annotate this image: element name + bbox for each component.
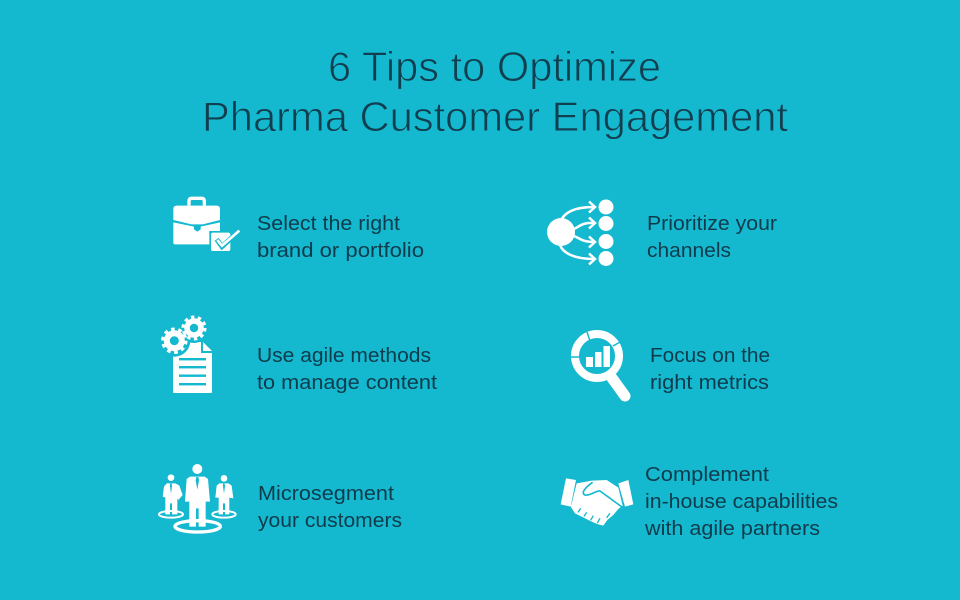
icon: channel network <box>547 200 614 266</box>
icon: handshake <box>561 478 633 526</box>
text: tip 4 <box>647 212 777 262</box>
text: tip 5 <box>650 344 770 394</box>
icon: briefcase with checkmark <box>173 198 239 251</box>
text: tip 3: Microsegment <box>258 482 394 505</box>
icon: business people on circles <box>159 464 236 532</box>
text: tip 6: with agile partners <box>644 517 820 540</box>
text: tip 1 <box>257 212 424 262</box>
text: tip 5: Focus on the <box>650 344 770 367</box>
title <box>202 43 788 140</box>
text: tip 1: Select the right <box>257 212 400 235</box>
text: tip 2: Use agile methods <box>257 344 431 367</box>
title: Pharma Customer Engagement <box>202 93 788 140</box>
text: tip 2 <box>257 344 437 394</box>
text: tip 4: channels <box>647 239 731 262</box>
text: tip 1: brand or portfolio <box>257 239 424 262</box>
icon: magnifier with bar chart <box>570 332 625 396</box>
text: tip 5: right metrics <box>650 371 769 394</box>
title: 6 Tips to Optimize <box>328 43 661 90</box>
text: tip 3 <box>258 482 402 532</box>
text: tip 6 <box>644 463 838 540</box>
text: tip 2: to manage content <box>257 371 437 394</box>
icon: gears and document <box>158 313 212 393</box>
text: tip 4: Prioritize your <box>647 212 777 235</box>
text: tip 6: Complement <box>645 463 769 486</box>
text: tip 6: in-house capabilities <box>645 490 838 513</box>
text: tip 3: your customers <box>258 509 402 532</box>
